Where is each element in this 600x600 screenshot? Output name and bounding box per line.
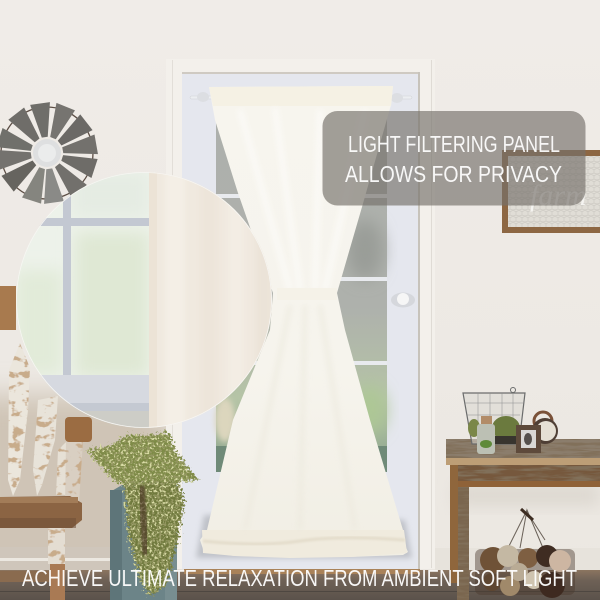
round zoom lens inset bbox=[15, 172, 272, 428]
plant bbox=[86, 432, 198, 596]
windmill wall decor bbox=[0, 102, 98, 204]
door frame and door bbox=[166, 59, 435, 569]
door knob bbox=[391, 292, 415, 308]
curtain rod bbox=[190, 92, 412, 103]
curtain panel bbox=[200, 86, 408, 558]
baseboard and floor bbox=[0, 547, 600, 600]
callout: light filtering panel bbox=[322, 111, 586, 206]
picture frame bbox=[516, 425, 541, 453]
side table bbox=[446, 439, 600, 600]
wire basket with plants bbox=[463, 388, 525, 454]
alarm clock bbox=[532, 412, 558, 444]
basket of decorative balls bbox=[475, 509, 575, 598]
plant stem bbox=[141, 486, 146, 555]
milk can bbox=[110, 485, 177, 600]
door window glass bbox=[215, 106, 387, 472]
farm sign on wall bbox=[502, 150, 600, 233]
chair bbox=[0, 343, 92, 600]
callout: light filtering panel: ALLOWS FOR PRIVACY bbox=[345, 161, 562, 187]
shelf block at left bbox=[0, 286, 16, 330]
curtain shadow on door bbox=[196, 515, 412, 558]
farm sign on wall: farm bbox=[530, 179, 587, 212]
